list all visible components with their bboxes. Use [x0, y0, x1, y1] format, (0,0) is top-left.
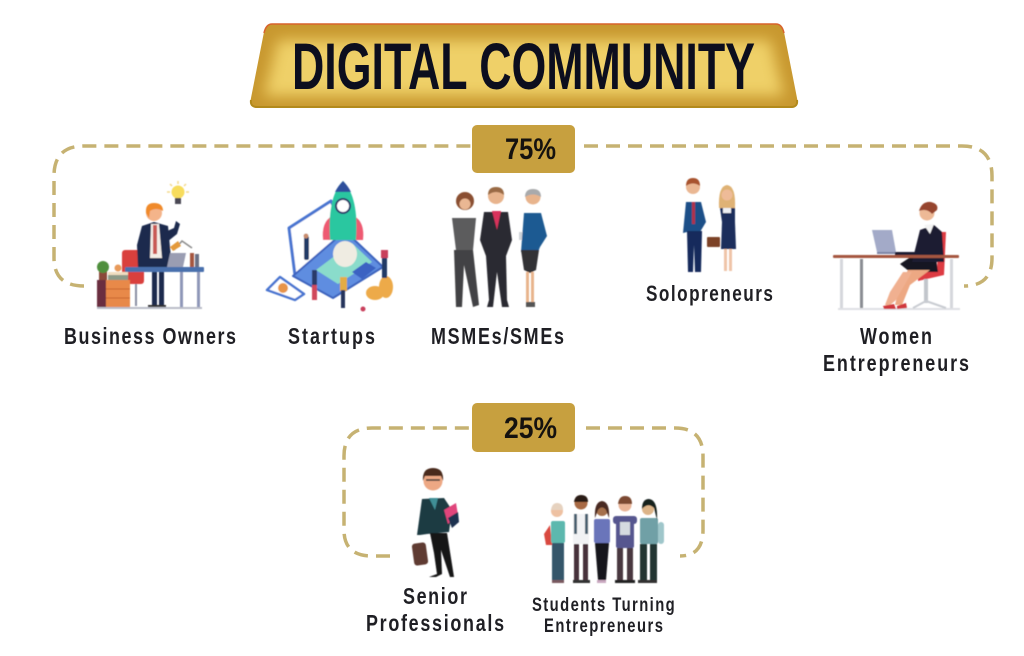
icon: woman entrepreneur at desk — [833, 202, 960, 310]
badge: 25%: 25% — [504, 412, 557, 445]
dashed bracket: 25% group — [344, 428, 703, 556]
figure: student 1 — [544, 503, 565, 583]
badge: 25% — [472, 403, 575, 452]
figure: man centre — [480, 187, 512, 307]
title text: DIGITAL COMMUNITY — [292, 29, 755, 103]
label: Students Turning Entrepreneurs — [532, 594, 675, 636]
label: Women Entrepreneurs: Women — [860, 324, 932, 350]
figure: woman left — [452, 192, 479, 307]
icon: briefcase — [707, 237, 720, 247]
label: Senior Professionals: Professionals — [366, 611, 504, 637]
label: Students Turning Entrepreneurs: Students Turning — [532, 594, 675, 615]
figure: student 5 — [638, 499, 664, 583]
figure: student 3 — [594, 501, 610, 583]
icon: coins — [366, 276, 393, 300]
icon: senior professional — [412, 468, 459, 577]
icon: startup rocket on laptop — [267, 181, 393, 312]
label: Business Owners: Business Owners — [64, 324, 236, 350]
dashed bracket: 75% group — [54, 146, 992, 286]
figure: woman — [719, 185, 736, 271]
label: Startups: Startups — [288, 324, 375, 350]
label: Senior Professionals — [366, 584, 504, 637]
badge: 75% — [472, 125, 575, 173]
label: Solopreneurs: Solopreneurs — [646, 282, 773, 307]
icon: solopreneurs couple — [683, 178, 736, 272]
title banner — [251, 24, 797, 108]
icon: business owner at desk — [97, 181, 204, 309]
label: Students Turning Entrepreneurs: Entrepreneurs — [544, 615, 663, 636]
icon: students group — [544, 495, 664, 583]
figure: student 2 — [573, 495, 590, 583]
label: MSMEs/SMEs: MSMEs/SMEs — [431, 324, 564, 350]
label: Women Entrepreneurs: Entrepreneurs — [823, 351, 969, 377]
icon: light bulb — [167, 181, 189, 204]
figure: student 4 — [613, 496, 637, 583]
icon: MSME business team — [452, 187, 547, 307]
label: Women Entrepreneurs — [823, 324, 969, 377]
label: Senior Professionals: Senior — [403, 584, 467, 610]
icon: phone — [267, 277, 304, 300]
icon: books — [444, 503, 459, 528]
icon: chair — [913, 232, 946, 308]
figure: woman right — [519, 189, 547, 307]
figure: man — [683, 178, 706, 272]
badge: 75%: 75% — [505, 133, 556, 166]
